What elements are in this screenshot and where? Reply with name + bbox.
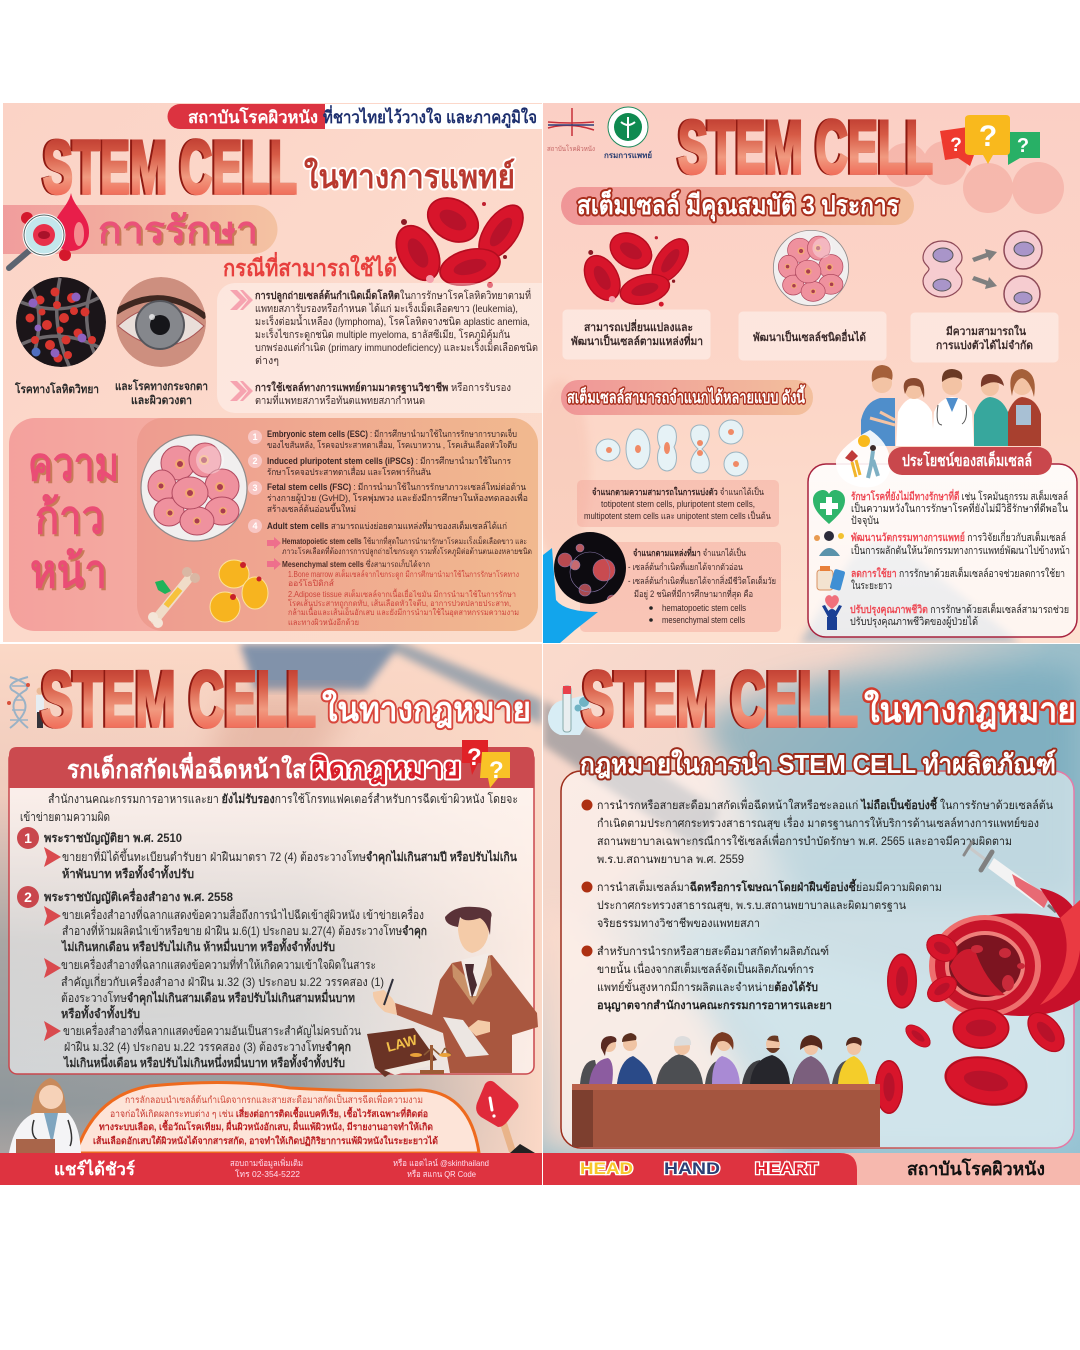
icon: cell division (923, 231, 1042, 312)
list: stem cell types: Adult stem cells สามารถแบ่งย่อยตามแหล่งที่มาของสเต็มเซลล์ได้แก่ (267, 519, 507, 531)
panel: stem cell properties and benefits (530, 103, 1080, 643)
list: stem cell types: สร้างเซลล์ต้นอ่อนขึ้นใหม่ (267, 502, 356, 514)
title: STEM CELL: STEM CELL (43, 125, 297, 209)
list: stem cell types: รักษาโรคจอประสาทตาเสื่อม และโรคพาร์กินสัน (267, 465, 431, 477)
card: applicable treatments: บกพร่องแต่กำเนิด (primary immunodeficiency) และมะเร็งเม็ดเลือดชนิด (255, 340, 538, 354)
heading: advances: ความ (28, 438, 119, 490)
icon: happy people blob (836, 430, 890, 487)
callout: warning: ทางระบบเลือด, เชื้อวัณโรคเทียม, ผื่นผิวหนังอักเสบ, ผื่นแพ้ผิวหนัง, มีรายงานอาจทำให้เกิด (99, 1119, 433, 1133)
illustration: medical team (861, 365, 1041, 446)
item: Cosmetics Act: ขายเครื่องสำอางที่ฉลากแสดงข้อความที่ทำให้เกิดความเข้าใจผิดในสาระ (61, 956, 376, 972)
heading: applicable cases: กรณีที่สามารถใช้ได้ (223, 251, 397, 281)
item: Cosmetics Act: ไม่เกินหนึ่งเดือน หรือปรับไม่เกินหนึ่งหมื่นบาท หรือทั้งจำทั้งปรับ (62, 1053, 345, 1070)
card: by source: hematopoetic stem cells (662, 603, 746, 613)
item: treat disease (813, 488, 1068, 527)
background: blue cloth and tube (543, 665, 1080, 1150)
title: STEM CELL: STEM CELL (41, 654, 316, 743)
icon: stem cell dish (141, 435, 247, 541)
title: STEM CELL: STEM CELL (582, 654, 858, 743)
band: treatment heading: การรักษา (100, 212, 260, 254)
decorative cells (884, 141, 1064, 214)
footer: share and contact: หรือ สแกน QR Code (407, 1169, 476, 1179)
card: by source: mesenchymal stem cells (662, 615, 745, 625)
item: quality of life (822, 595, 1069, 630)
card: applicable treatments: ต่างๆ (255, 355, 279, 367)
list: stem cell types: 1 (252, 432, 258, 442)
card: applicable treatments (217, 283, 562, 413)
title: STEM CELL (580, 654, 858, 743)
list: stem cell types: 2 (252, 456, 258, 466)
card: applicable treatments: การปลูกถ่ายเซลล์ต้นกำเนิดเม็ดโลหิตในการรักษาโรคโลหิตวิทยาตามที่ (255, 288, 531, 303)
callout: warning (76, 1082, 479, 1153)
card: by source: มีอยู่ 2 ชนิดที่มีการศึกษามากที่สุด คือ (634, 587, 753, 600)
footer: head hand heart and institute: HEAD (580, 1159, 633, 1178)
item: innovation: พัฒนานวัตกรรมทางการแพทย์ การวิจัยเกี่ยวกับสเต็มเซลล์ (851, 530, 1066, 544)
illustration: lawyer (367, 907, 538, 1077)
illustration: floating red blood cells (875, 928, 1072, 1114)
illustration: syringe (964, 842, 1056, 912)
icon: question bubbles: ? (950, 135, 962, 156)
panel: product law text: การนำรกหรือสายสะดือมาสกัดเพื่อฉีดหน้าใสหรือชะลอแก่ ไม่ถือเป็นข้อบ่งชี้ ในการรักษาด้วยเซลล์ต้น (597, 796, 1053, 812)
item: Cosmetics Act (17, 886, 427, 1070)
item: Drug Act: ขายยาที่มิได้ขึ้นทะเบียนตำรับยา ฝ่าฝืนมาตรา 72 (4) ต้องระวางโทษจำคุกไม่เกินสามปี หรือปรับไม่เกิน (62, 848, 518, 865)
panel: product law text: สำหรับการนำรกหรือสายสะดือมาสกัดทำผลิตภัณฑ์ (597, 944, 829, 958)
illustration: court jury and table (572, 1032, 880, 1147)
item: Cosmetics Act: ขายเครื่องสำอางที่ฉลากแสดงข้อความสื่อถึงการนำไปฉีดเข้าสู่ผิวหนัง เข้าข่ายเครื่อง (62, 906, 424, 923)
title: STEM CELL (39, 654, 316, 743)
footer: share and contact (0, 1153, 542, 1185)
list: stem cell types: ออร์โธปิดิกส์ (288, 578, 334, 588)
list: stem cell types: Hematopoietic stem cells ใช้มากที่สุดในการนำมารักษาโรคมะเร็งเม็ดเลือดขาว และ (282, 535, 527, 546)
heading: differentiation: สเต็มเซลล์สามารถจำแนกได้หลายแบบ ดังนี้ (567, 384, 805, 407)
header: benefits (888, 447, 1052, 475)
heading: advances: ก้าว (37, 493, 106, 545)
icon: hand holding cells (543, 532, 626, 643)
text: intro: สำนักงานคณะกรรมการอาหารและยา ยังไม่รับรองการใช้โกรทแฟคเตอร์สำหรับการฉีดเข้าผิวหนัง โดยจะ (48, 791, 518, 806)
heading: advances: หน้า (30, 545, 107, 597)
list: stem cell types: และทางผิวหนังอีกด้วย (288, 618, 359, 627)
icon: question bubbles: ? (979, 120, 997, 153)
footer: head hand heart and institute (543, 1153, 1080, 1185)
footer: share and contact: แชร์ได้ชัวร์ (54, 1159, 136, 1179)
callout: warning: การลักลอบนำเซลล์ต้นกำเนิดจากรกและสายสะดือมาสกัดเป็นสารฉีดเพื่อความงาม (125, 1093, 423, 1106)
title: STEM CELL: STEM CELL (580, 654, 856, 743)
heading: advances (30, 453, 118, 590)
subtitle: in medicine: ในทางการแพทย์ (304, 157, 515, 195)
decorative background test tube (800, 542, 1020, 643)
illustration: lawyer: LAW (385, 1031, 420, 1055)
top banner: institute tagline: สถาบันโรคผิวหนัง (188, 107, 318, 127)
card: self renewal: การแบ่งตัวได้ไม่จำกัด (936, 338, 1033, 352)
icon: bone with marrow (148, 567, 200, 628)
header: illegal (9, 747, 534, 788)
icon: dividing cells (596, 420, 748, 476)
text: intro: เข้าข่ายตามความผิด (20, 810, 110, 824)
footer: share and contact: สอบถามข้อมูลเพิ่มเติม (230, 1157, 303, 1169)
illustration: female doctor (9, 1078, 81, 1153)
card: by source: จำแนกตามแหล่งที่มา จำแนกได้เป็น (633, 546, 746, 558)
list: stem cell types: 3 (252, 483, 258, 493)
panel: product law text: ขายนั้น เนื่องจากสเต็มเซลล์จัดเป็นผลิตภัณฑ์การ (597, 961, 814, 976)
label: cornea: และโรคทางกระจกตา (115, 378, 208, 393)
panel: product law text: พ.ร.บ.สถานพยาบาล พ.ศ. 2559 (597, 854, 744, 866)
icon: question bubbles (462, 740, 510, 788)
title: STEM CELL: STEM CELL (39, 654, 314, 743)
logo: institute of dermatology: สถาบันโรคผิวหนัง (547, 144, 595, 153)
card: applicable treatments: มะเร็งต่อมน้ำเหลือง (lymphoma), โรคโลหิตจางชนิด aplastic anemia, (255, 314, 530, 328)
heading: advances: หน้า (32, 547, 109, 599)
footer: share and contact: โทร 02-354-5222 (235, 1169, 300, 1179)
card: by source: - เซลล์ต้นกำเนิดที่แยกได้จากสิ่งมีชีวิตโตเต็มวัย (628, 574, 776, 586)
panel: advances (9, 418, 538, 631)
item: Drug Act: ห้าพันบาท หรือทั้งจำทั้งปรับ (62, 864, 194, 881)
list: stem cell types: 1.Bone marrow สเต็มเซลล์จากไขกระดูก มีการศึกษานำมาใช้ในการรักษาโรคทาง (288, 569, 519, 580)
list: stem cell types: Induced pluripotent stem cells (iPSCs) : มีการศึกษานำมาใช้ในการ (267, 456, 511, 466)
heading: three properties: สเต็มเซลล์ มีคุณสมบัติ 3 ประการ (577, 189, 899, 222)
item: Drug Act: พระราชบัญญัติยา พ.ศ. 2510 (44, 831, 182, 845)
list: stem cell types (248, 427, 532, 627)
item: reduce medication: ในระยะยาว (851, 579, 892, 592)
item: Cosmetics Act: ขายเครื่องสำอางที่ฉลากแสดงข้อความอันเป็นสาระสำคัญไม่ครบถ้วน (63, 1022, 361, 1038)
footer: head hand heart and institute: HAND (664, 1159, 720, 1178)
panel: product law text: สถานพยาบาลเฉพาะกรณีการใช้เซลล์เพื่อการบำบัดรักษา พ.ศ. 2565 และอาจมีความผิดตาม (597, 833, 1012, 848)
card: can change (563, 310, 710, 359)
item: innovation (814, 530, 1070, 557)
item: Cosmetics Act: 2 (24, 889, 32, 905)
icon: fat cells (210, 560, 268, 622)
top banner: institute tagline (168, 104, 542, 129)
item: quality of life: ปรับปรุงคุณภาพชีวิตของผู้ป่วยได้ (850, 615, 978, 628)
card: by source (580, 542, 781, 632)
panel: product law text: แพทย์ขั้นสูงหากมีการผลิตและจำหน่ายต้องได้รับ (597, 979, 818, 994)
callout: warning: อาจก่อให้เกิดผลกระทบต่าง ๆ เช่น เสี่ยงต่อการติดเชื้อแบคทีเรีย, เชื้อไวรัสเฉพาะที่ติดต่อ (110, 1106, 428, 1120)
item: treat disease: ปัจจุบัน (851, 515, 879, 527)
list: stem cell types: Mesenchymal stem cells ซึ่งสามารถเก็บได้จาก (282, 558, 430, 569)
label: hematology: โรคทางโลหิตวิทยา (14, 381, 99, 396)
card: by source: - เซลล์ต้นกำเนิดที่แยกได้จากตัวอ่อน (628, 560, 743, 572)
card: differentiate: พัฒนาเป็นเซลล์ชนิดอื่นได้ (753, 329, 866, 344)
list: stem cell types: Fetal stem cells (FSC) : มีการนำมาใช้ในการรักษาภาวะเซลล์ใหม่ต่อต้าน (267, 481, 526, 492)
band: treatment heading (3, 205, 278, 254)
list: stem cell types: กล้ามเนื้อและเส้นเอ็นอักเสบ และยังมีการนำมาใช้ในอุตสาหกรรมความงาม (288, 606, 519, 617)
item: Cosmetics Act: สำอางที่ห้ามผลิตนำเข้าหรือขาย ฝ่าฝืน ม.6(1) ประกอบ ม.27(4) ต้องระวางโทษจำคุก (62, 922, 427, 939)
card: applicable treatments: การใช้เซลล์ทางการแพทย์ตามมาตรฐานวิชาชีพ หรือการรับรอง (255, 380, 511, 394)
heading: advances: ก้าว (35, 491, 104, 543)
illustration: blood vessel (929, 888, 1080, 1017)
logo: institute of dermatology (547, 108, 595, 153)
card: by capability (577, 480, 779, 527)
logo: department of medical services (604, 107, 652, 160)
item: Cosmetics Act: สำคัญเกี่ยวกับเครื่องสำอาง ฝ่าฝืน ม.32 (3) ประกอบ ม.22 วรรคสอง (1) (61, 973, 384, 989)
card: self renewal (911, 313, 1058, 362)
item: Cosmetics Act: พระราชบัญญัติเครื่องสำอาง พ.ศ. 2558 (44, 888, 233, 904)
illustration: DNA and scientist (7, 677, 44, 728)
list: stem cell types: ของไขสันหลัง, โรคจอประสาทตาเสื่อม, โรคเบาหวาน , โรคเส้นเลือดหัวใจตีบ (267, 438, 517, 450)
top banner: institute tagline: ที่ชาวไทยไว้วางใจ และภาคภูมิใจ (323, 105, 537, 129)
card: differentiate (739, 312, 886, 360)
item: Cosmetics Act: ต้องระวางโทษจำคุกไม่เกินสามเดือน หรือปรับไม่เกินสามหมื่นบาท (61, 989, 355, 1006)
photo: eye (116, 277, 206, 367)
title: STEM CELL (676, 118, 933, 176)
icon: stem cell dish (773, 230, 849, 306)
icon: blood drop and magnifier (9, 193, 89, 268)
footer: head hand heart and institute: สถาบันโรคผิวหนัง (907, 1158, 1045, 1179)
item: reduce medication (817, 566, 1065, 592)
panel: product law text (561, 771, 1074, 1148)
card: can change: พัฒนาเป็นเซลล์ตามแหล่งที่มา (571, 333, 703, 348)
photo: blood cells (16, 277, 106, 368)
panel: product law text: กำเนิดตามประกาศกระทรวงสาธารณสุข เรื่อง มาตรฐานการให้บริการด้านเซลล์ทางการแพทย์ของ (597, 815, 1039, 830)
panel: benefits (808, 430, 1077, 637)
panel: illegal placenta injection (9, 740, 538, 1077)
item: Cosmetics Act: ไม่เกินหกเดือน หรือปรับไม่เกิน ห้าหมื่นบาท หรือทั้งจำทั้งปรับ (60, 937, 335, 954)
icon: red blood cells (395, 197, 524, 288)
callout: warning: เส้นเลือดอักเสบใต้ผิวหนังได้จากสารสกัด, อาจทำให้เกิดปฏิกิริยาการแพ้ผิวหนังในระยะยาวได้ (93, 1135, 438, 1147)
card: by capability: จำแนกตามความสามารถในการแบ่งตัว จำแนกได้เป็น (592, 485, 764, 497)
card: self renewal: มีความสามารถใน (946, 324, 1026, 338)
list: stem cell types: ร่างกายผู้ป่วย (GvHD), โรคพุ่มพวง และยังมีการศึกษาในห้องทดลองเพื่อ (267, 491, 528, 504)
background test tube (200, 644, 542, 790)
label: cornea (116, 379, 208, 404)
panel: product law text: จริยธรรมทางวิชาชีพของแพทยสภา (597, 917, 760, 930)
panel: law on placenta injections (0, 644, 542, 1185)
icon: question bubbles: ? (467, 744, 482, 771)
title: STEM CELL (41, 138, 297, 196)
subtitle: in law: ในทางกฎหมาย (322, 689, 531, 729)
heading: differentiation (561, 380, 813, 415)
icon: question bubbles (940, 115, 1040, 166)
footer: share and contact: หรือ แอดไลน์ @skinthailand (393, 1158, 489, 1168)
icon: question bubbles: ? (489, 757, 504, 784)
footer: head hand heart and institute: HEART (755, 1159, 819, 1178)
logo: department of medical services: กรมการแพทย์ (604, 150, 652, 160)
heading: product law: กฎหมายในการนำ STEM CELL ทำผลิตภัณฑ์ (580, 749, 1056, 779)
card: by capability: totipotent stem cells, pluripotent stem cells, (601, 499, 755, 509)
label: cornea: และผิวดวงตา (131, 394, 192, 407)
item: Cosmetics Act: ฝ่าฝืน ม.32 (4) ประกอบ ม.22 วรรคสอง (3) ต้องระวางโทษจำคุก (64, 1040, 351, 1055)
list: stem cell types: 2.Adipose tissue สเต็มเซลล์จากเนื้อเยื่อไขมัน มีการนำมาใช้ในการรักษา (288, 588, 516, 599)
icon: red blood cells (584, 232, 689, 307)
panel: STEM CELL in medicine and treatment (3, 103, 562, 642)
panel: product law text: การนำสเต็มเซลล์มาฉีดหรือการโฆษณาโดยฝ่าฝืนข้อบ่งชี้ย่อมมีความผิดตาม (597, 878, 942, 894)
list: stem cell types: โรคเส้นประสาทถูกกดทับ, เส้นเลือดหัวใจตีบ, อาการปวดปลายประสาท, (288, 598, 511, 609)
panel: law on stem cell products (543, 644, 1080, 1185)
item: Cosmetics Act: หรือทั้งจำทั้งปรับ (61, 1004, 140, 1021)
band: treatment heading: การรักษา (98, 210, 258, 252)
header: benefits: ประโยชน์ของสเต็มเซลล์ (902, 449, 1032, 470)
card: applicable treatments: แพทยสภารับรองหรือกำหนด ได้แก่ มะเร็งเม็ดเลือดขาว (leukemia), (255, 301, 518, 315)
icon: test tube with DNA (548, 686, 591, 735)
text: intro (20, 791, 518, 824)
title: STEM CELL: STEM CELL (41, 125, 295, 209)
icon: warning sign (476, 1081, 535, 1153)
icon: question bubbles: ? (1017, 135, 1029, 157)
list: stem cell types: ภาวะโรคเลือดที่ต้องการการปลูกถ่ายไขกระดูก รวมทั้งโรคภูมิต่อต้านตนเองหลายชนิด (282, 545, 532, 557)
header: illegal: รกเด็กสกัดเพื่อฉีดหน้าใส (67, 752, 307, 784)
list: stem cell types: 4 (252, 521, 258, 531)
card: can change: สามารถเปลี่ยนแปลงและ (584, 319, 693, 334)
card: applicable treatments: มะเร็งไขกระดูกชนิด multiple myeloma, ธาลัสซีเมีย, โรคภูมิคุ้มกัน (255, 327, 510, 341)
heading: advances: ความ (30, 440, 121, 492)
header: illegal: ผิดกฎหมาย (311, 753, 461, 785)
card: applicable treatments: ตามที่แพทยสภาหรือทันตแพทยสภากำหนด (255, 393, 425, 407)
item: Drug Act (17, 827, 518, 881)
card: by capability: multipotent stem cells และ unipotent stem cells เป็นต้น (584, 509, 771, 521)
item: Drug Act: 1 (24, 830, 32, 846)
list: stem cell types: Embryonic stem cells (ESC) : มีการศึกษานำมาใช้ในการรักษาการบาดเจ็บ (267, 427, 517, 439)
panel: product law text: อนุญาตจากสำนักงานคณะกรรมการอาหารและยา (597, 998, 832, 1013)
panel: product law text: ประกาศกระทรวงสาธารณสุข, พ.ร.บ.สถานพยาบาลและผิดมาตรฐาน (597, 899, 906, 912)
